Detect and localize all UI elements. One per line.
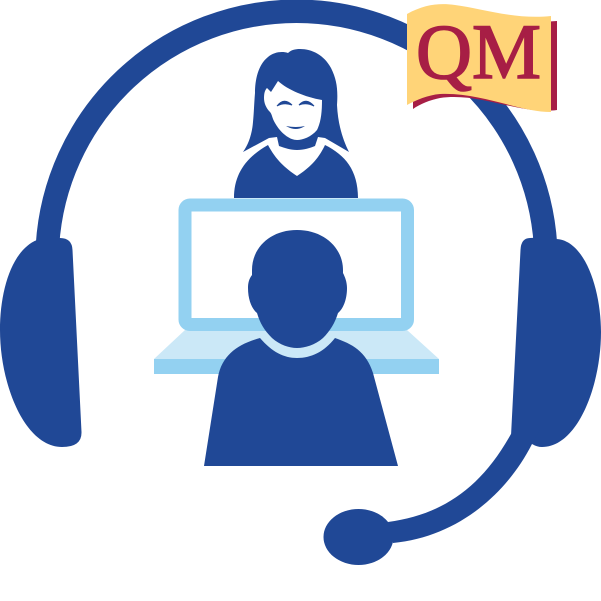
- mouth: [286, 126, 305, 129]
- laptop: [154, 205, 439, 374]
- face: [264, 81, 322, 140]
- woman on screen: [234, 49, 358, 198]
- laptop base front: [154, 359, 439, 374]
- QM flag logo: [407, 4, 557, 112]
- hair: [243, 49, 349, 152]
- torso: [234, 145, 358, 198]
- QM letters: QM: [416, 8, 541, 95]
- microphone: [324, 509, 394, 565]
- laptop screen: [185, 205, 408, 324]
- body: [204, 338, 398, 466]
- man in front of laptop: [204, 230, 398, 466]
- flag body: [407, 4, 551, 112]
- microphone boom: [388, 425, 540, 543]
- laptop base top: [154, 330, 439, 359]
- flag shadow: [413, 21, 557, 111]
- right ear cup: [511, 238, 601, 447]
- headband: [48, 11, 546, 245]
- head: [248, 230, 347, 348]
- eyes: [277, 101, 314, 106]
- left ear cup: [0, 237, 82, 447]
